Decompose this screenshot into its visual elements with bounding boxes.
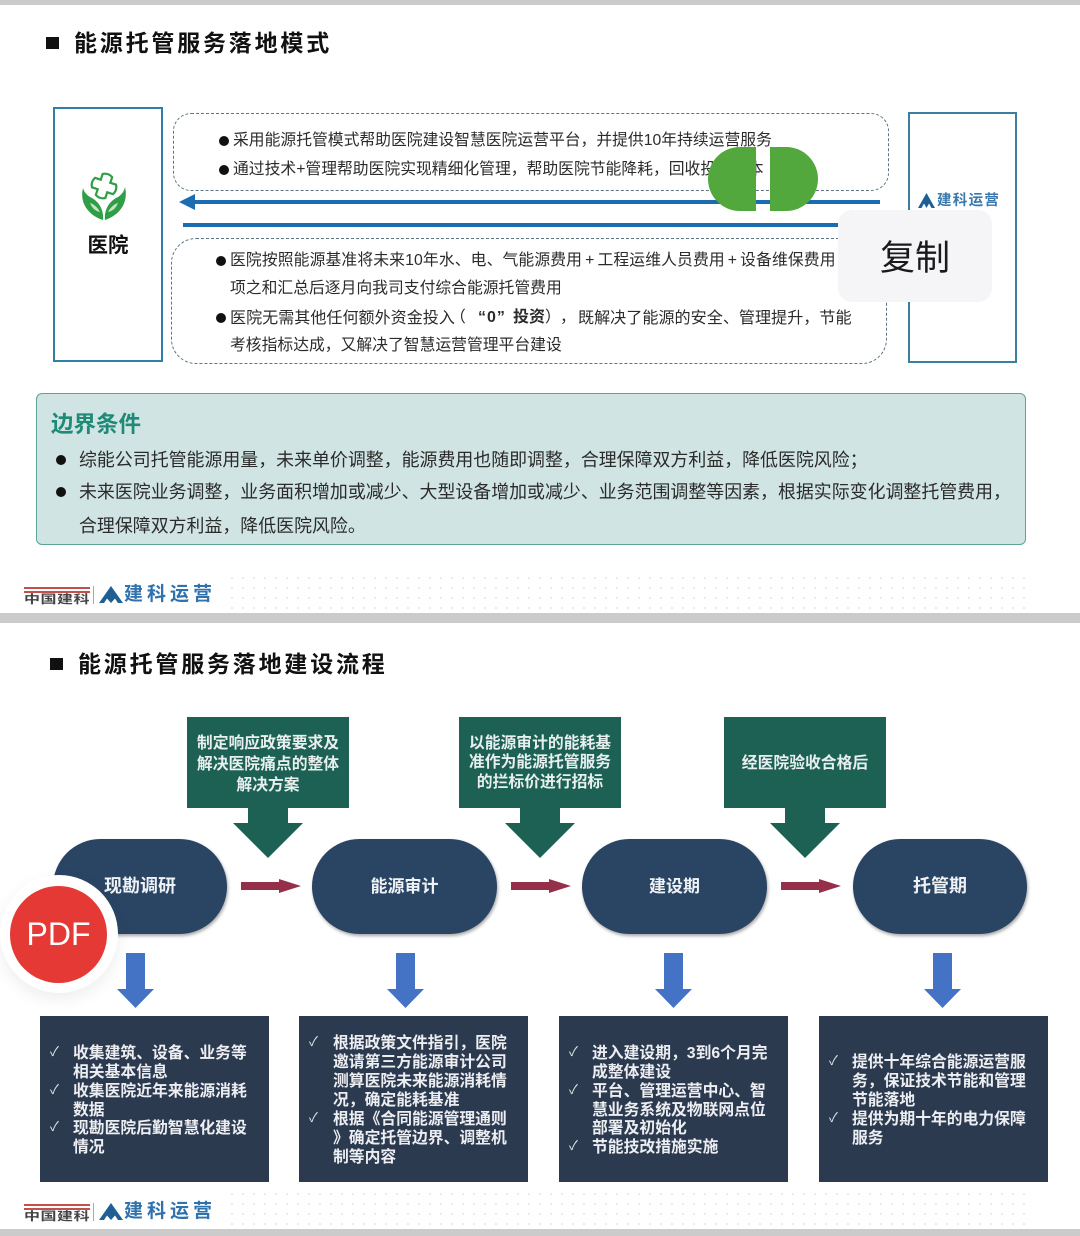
heading: construction process: 能源托管服务落地建设流程: [78, 651, 388, 677]
panel: audit tasks: [299, 1016, 528, 1182]
stage: construction: [582, 839, 767, 934]
arrow: blue left arrow: [179, 194, 880, 210]
bullet text: zero investment: 投资: [513, 309, 545, 326]
stage: survey: [53, 839, 227, 934]
stage: managed period: 托管期: [913, 876, 967, 896]
footer logo: top slide: 中国建科: [24, 594, 90, 606]
stage: managed period: [853, 839, 1027, 934]
panel: lower dashed payment: [171, 238, 887, 364]
panel: managed tasks: 提供十年综合能源运营服: [852, 1054, 1026, 1071]
badge: PDF: [0, 875, 118, 993]
panel: audit tasks: 根据《合同能源管理通则: [333, 1111, 507, 1128]
panel: construction tasks: 进入建设期，3到6个月完: [592, 1045, 768, 1062]
panel: survey tasks: 数据: [73, 1102, 105, 1119]
arrow: survey to audit: [241, 879, 301, 893]
panel: audit tasks: 制等内容: [333, 1149, 396, 1166]
panel: hospital: [53, 107, 163, 362]
panel: managed tasks: 务，保证技术节能和管理: [852, 1073, 1026, 1090]
callout: step one: [187, 717, 349, 858]
popup: copy button: [838, 210, 992, 302]
panel: boundary conditions: [36, 393, 1026, 545]
footer logo: top slide: 建科运营: [124, 584, 216, 605]
logo: jianke operation: 建科运营: [937, 193, 1000, 209]
arrow: survey down: [117, 953, 154, 1008]
panel: survey tasks: 收集医院近年来能源消耗: [73, 1083, 247, 1100]
bullet text: refined management: 通过技术+管理帮助医院实现精细化管理，帮助医院节能降耗，回收投资成本: [233, 161, 764, 178]
panel: managed tasks: 服务: [852, 1130, 884, 1147]
footer logo: top slide: [24, 584, 216, 606]
bullet text: business adjustment: 未来医院业务调整，业务面积增加或减少、大型设备增加或减少、业务范围调整等因素，根据实际变化调整托管费用，: [79, 482, 1011, 502]
bullet text: price adjustment: 综能公司托管能源用量，未来单价调整，能源费用也随即调整，合理保障双方利益，降低医院风险；: [79, 450, 868, 470]
callout: step one: 制定响应政策要求及: [197, 735, 339, 752]
panel: survey tasks: ✓: [50, 1119, 59, 1134]
bullet text: zero investment: ，: [560, 309, 576, 326]
bullet text: business adjustment: [56, 482, 1011, 536]
panel: managed tasks: ✓: [829, 1110, 838, 1125]
panel: audit tasks: 邀请第三方能源审计公司: [333, 1054, 507, 1071]
panel: construction tasks: 成整体建设: [592, 1064, 671, 1081]
heading: boundary conditions: 边界条件: [51, 412, 141, 437]
panel: audit tasks: 测算医院未来能源消耗情: [333, 1073, 507, 1090]
arrow: audit to construction: [511, 879, 571, 893]
popup: copy button: 复制: [880, 239, 950, 278]
label: hospital: 医院: [88, 234, 128, 257]
bullet text: payment: 医院按照能源基准将未来10年水、电、气能源费用+工程运维人员费用+设备维保费用: [230, 252, 836, 269]
panel: construction tasks: 部署及初始化: [592, 1120, 687, 1137]
bullet text: zero investment: [216, 308, 852, 354]
callout: step two: 以能源审计的能耗基: [469, 735, 611, 752]
panel: survey tasks: 现勘医院后勤智慧化建设: [73, 1120, 247, 1137]
panel: construction tasks: ✓: [569, 1082, 578, 1097]
arrow: audit down: [387, 953, 424, 1008]
bottom grey divider: [0, 1229, 1080, 1236]
panel: upper dashed services: [173, 113, 889, 191]
badge: PDF: PDF: [26, 916, 90, 952]
panel: managed tasks: 提供为期十年的电力保障: [852, 1111, 1026, 1128]
panel: audit tasks: 》确定托管边界、调整机: [333, 1130, 507, 1147]
arrow: blue return line: [183, 223, 839, 227]
panel: audit tasks: 根据政策文件指引，医院: [333, 1035, 507, 1052]
callout: step one: 解决医院痛点的整体: [197, 756, 339, 773]
callout: step two: 准作为能源托管服务: [469, 754, 611, 771]
arrow: managed down: [924, 953, 961, 1008]
panel: construction tasks: 慧业务系统及物联网点位: [592, 1102, 766, 1119]
callout: step two: 的拦标价进行招标: [477, 774, 603, 791]
panel: construction tasks: 平台、管理运营中心、智: [592, 1083, 766, 1100]
panel: audit tasks: ✓: [309, 1110, 318, 1125]
panel: audit tasks: 况，确定能耗基准: [333, 1092, 459, 1109]
grey divider between slides: [0, 613, 1080, 623]
panel: managed tasks: ✓: [829, 1053, 838, 1068]
panel: managed tasks: 节能落地: [852, 1092, 915, 1109]
panel: survey tasks: ✓: [50, 1082, 59, 1097]
panel: construction tasks: 节能技改措施实施: [592, 1139, 718, 1156]
panel: construction tasks: [559, 1016, 788, 1182]
bullet text: payment: 项之和汇总后逐月向我司支付综合能源托管费用: [230, 280, 562, 297]
bullet text: payment: [216, 251, 836, 297]
panel: managed tasks: [819, 1016, 1048, 1182]
callout: step one: 解决方案: [236, 777, 300, 794]
stage: energy audit: 能源审计: [370, 877, 438, 896]
icon: green split pill overlay: [708, 147, 818, 211]
callout: step three: [724, 717, 886, 858]
footer logo: bottom slide: 中国建科: [24, 1211, 90, 1223]
heading: landing model: 能源托管服务落地模式: [74, 30, 332, 56]
decorative dots: top footer: [231, 577, 1025, 609]
panel: survey tasks: 情况: [73, 1139, 105, 1156]
stage: energy audit: [312, 839, 497, 934]
bullet text: zero investment: 既解决了能源的安全、管理提升，节能: [578, 309, 852, 327]
panel: audit tasks: ✓: [309, 1034, 318, 1049]
panel: construction tasks: ✓: [569, 1138, 578, 1153]
panel: survey tasks: 相关基本信息: [73, 1064, 168, 1081]
panel: survey tasks: 收集建筑、设备、业务等: [73, 1045, 247, 1062]
bullet text: zero investment: “0”: [478, 309, 506, 326]
panel: survey tasks: ✓: [50, 1044, 59, 1059]
bullet text: zero investment: 考核指标达成，又解决了智慧运营管理平台建设: [230, 337, 562, 354]
callout: step two: [459, 717, 621, 858]
arrow: construction down: [655, 953, 692, 1008]
footer logo: bottom slide: 建科运营: [124, 1201, 216, 1222]
bullet text: business adjustment: 合理保障双方利益，降低医院风险。: [79, 516, 366, 536]
panel: survey tasks: [40, 1016, 269, 1182]
top grey divider: [0, 0, 1080, 5]
decorative dots: bottom footer: [231, 1193, 1025, 1225]
bullet text: zero investment: 医院无需其他任何额外资金投入: [230, 309, 455, 327]
icon: hospital cross in hands: [82, 172, 126, 220]
arrow: construction to managed: [781, 879, 841, 893]
bullet text: platform: 采用能源托管模式帮助医院建设智慧医院运营平台，并提供10年持续运营服务: [233, 132, 772, 149]
stage: construction: 建设期: [649, 877, 700, 896]
bullet text: zero investment: （: [450, 309, 466, 326]
callout: step three: 经医院验收合格后: [742, 755, 868, 772]
panel: service provider: [908, 112, 1017, 363]
bullet text: zero investment: ）: [545, 309, 561, 326]
panel: construction tasks: ✓: [569, 1044, 578, 1059]
footer logo: bottom slide: [24, 1200, 216, 1223]
stage: survey: 现勘调研: [104, 876, 176, 896]
